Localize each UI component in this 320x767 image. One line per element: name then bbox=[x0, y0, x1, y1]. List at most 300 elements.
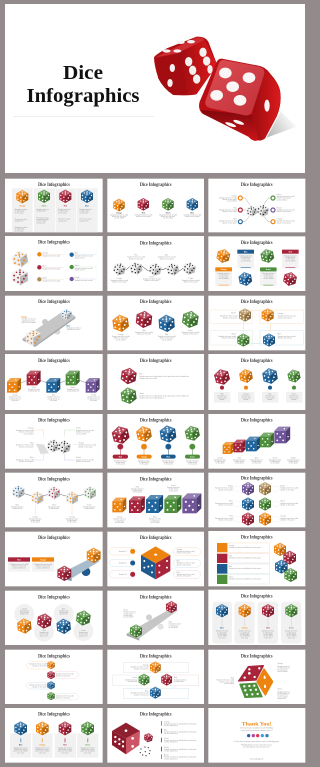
slide 17: five growing dice row: Blue bbox=[153, 517, 157, 519]
slide 28: dice above four grey panels: Sample text here to bbox=[35, 747, 50, 749]
slide 10: five dice wave: Blue bbox=[52, 395, 55, 397]
slide 22: dice with grey circles: here to add bbox=[20, 611, 29, 614]
slide 27: exploded three-face die: can be edited bbox=[277, 670, 287, 673]
slide 1: four dice with bullet panels: The text is a key bbox=[15, 218, 27, 221]
slide 2: four dice row: Green bbox=[166, 212, 170, 214]
slide 10: five dice wave: Sample text here bbox=[47, 396, 60, 399]
slide 1: four dice with bullet panels bbox=[5, 179, 103, 232]
slide 25: vertical dice with pills: Dice Infographics bbox=[38, 654, 70, 659]
slide 29: big red die with list: can be edited here bbox=[164, 724, 178, 727]
slide 27: exploded three-face die: Dice Infographics bbox=[241, 654, 273, 659]
slide 18: dice grid with side labels: Green bbox=[280, 501, 285, 503]
slide 18: dice grid with side labels: Sample text here to add bbox=[280, 488, 298, 490]
slide 6: dice and header cards: can be edited bbox=[263, 277, 273, 280]
slide 7: seesaw with white dice: Sample text here to bbox=[22, 319, 36, 321]
slide 30: thank you: Do you have a design request please visit our SlideEgg page bbox=[234, 740, 279, 743]
slide 10: five dice wave: Sample text here bbox=[9, 396, 21, 399]
illustration: two red dice bbox=[154, 37, 297, 141]
slide 26: four dice in diamond with boxes: Blue bbox=[145, 690, 148, 692]
slide 3: white dice hub with six rings: details on this point bbox=[222, 210, 237, 213]
slide 22: dice with grey circles: Orange bbox=[22, 608, 27, 610]
slide 13: central dice with elbow connectors: can be edited bbox=[23, 432, 33, 435]
slide 17: five growing dice row: on this point bbox=[169, 489, 178, 492]
slide 25: vertical dice with pills bbox=[5, 650, 103, 704]
slide 12: four dice with dots and panels: here to add bbox=[242, 396, 250, 399]
slide 15: ascending staircase of dice: Sample text here bbox=[233, 458, 246, 461]
slide 3: white dice hub with six rings: can be edited bbox=[227, 200, 237, 203]
slide 4: white dice with six list items: Red bbox=[42, 265, 45, 267]
slide 12: four dice with dots and panels: here to add bbox=[266, 396, 274, 399]
slide 9: four dice cycle with boxes: Sample text here to add bbox=[218, 336, 236, 338]
slide 28: dice above four grey panels: point can be edited bbox=[58, 750, 72, 753]
slide 27: exploded three-face die: Orange bbox=[277, 663, 283, 665]
slide 13: central dice with elbow connectors: details on this point bbox=[19, 445, 34, 448]
slide 20: large tri-colour die with pills bbox=[107, 532, 204, 586]
slide 5: five white dice zigzag: Dice Infographics bbox=[140, 241, 172, 246]
slide 8: four large tumbling dice: can be edited bbox=[116, 338, 126, 341]
panel: hero title slide bbox=[5, 4, 305, 173]
slide 7: seesaw with white dice: Blue bbox=[67, 325, 70, 327]
slide 14: four dice with badges and pills: Sample text here bbox=[114, 460, 127, 462]
slide 13: central dice with elbow connectors: Red bbox=[30, 442, 33, 444]
slide 10: five dice wave: this point bbox=[90, 399, 98, 402]
slide 27: exploded three-face die: sample text bbox=[277, 697, 286, 700]
slide 18: dice grid with side labels: Sample text here to add bbox=[215, 488, 233, 490]
slide 6: dice and header cards: Sample text here bbox=[239, 255, 252, 257]
slide 11: two dice with cross and check: Sample text here to add details on this point that can be edited here bbox=[139, 394, 189, 397]
slide 27: exploded three-face die: this point here bbox=[277, 694, 288, 697]
slide 28: dice above four grey panels: here now bbox=[39, 752, 47, 754]
slide 20: large tri-colour die with pills: Blue bbox=[177, 561, 180, 563]
slide 20: large tri-colour die with pills: Sample 01 bbox=[119, 551, 127, 553]
slide 7: seesaw with white dice: Sample text here to bbox=[67, 327, 81, 329]
slide 23: seesaw with green and red dice: Sample text here bbox=[123, 611, 136, 614]
slide 23: seesaw with green and red dice: Green bbox=[123, 610, 128, 612]
slide 1: four dice with bullet panels: on this point bbox=[36, 221, 46, 224]
title: Dice bbox=[63, 62, 103, 84]
slide 10: five dice wave: Orange bbox=[12, 395, 18, 397]
slide 29: big red die with list: Sample text here to add details on this point bbox=[164, 723, 196, 725]
slide 11: two dice with cross and check: Red bbox=[139, 374, 142, 376]
slide 17: five growing dice row: Sample text here bbox=[131, 487, 144, 490]
slide 24: four rounded panels with dice: here now bbox=[219, 637, 226, 639]
slide 17: five growing dice row: Sample text here bbox=[167, 486, 180, 489]
slide 13: central dice with elbow connectors: Sample text here to add bbox=[76, 430, 94, 432]
slide 8: four large tumbling dice: Sample text here to add bbox=[112, 335, 130, 338]
slide 12: four dice with dots and panels: Sample text bbox=[290, 395, 299, 398]
slide 29: big red die with list: Sample text here to add details on this point bbox=[164, 757, 196, 759]
slide 18: dice grid with side labels: Dice Infographics bbox=[241, 477, 273, 482]
slide 13: central dice with elbow connectors: can be edited bbox=[76, 432, 86, 435]
slide 1: four dice with bullet panels: Orange bbox=[19, 206, 25, 208]
slide 27: exploded three-face die bbox=[208, 650, 305, 704]
slide 4: white dice with six list items: Sample text here to add bbox=[75, 279, 92, 282]
slide 26: four dice in diamond with boxes: details on this point bbox=[134, 667, 149, 670]
slide 10: five dice wave: to add details on bbox=[28, 390, 40, 393]
slide 4: white dice with six list items: Dice Infographics bbox=[38, 241, 70, 246]
slide 22: dice with grey circles: Sample text bbox=[40, 631, 49, 634]
slide 11: two dice with cross and check bbox=[107, 354, 204, 410]
slide 10: five dice wave: to add details on bbox=[48, 397, 60, 400]
slide 3: white dice hub with six rings: Orange bbox=[277, 219, 282, 221]
slide 27: exploded three-face die: Sample text here bbox=[277, 666, 290, 668]
slide 15: ascending staircase of dice: Green bbox=[273, 457, 277, 459]
slide 12: four dice with dots and panels: Green bbox=[292, 394, 296, 396]
slide 20: large tri-colour die with pills: details on this point bbox=[177, 552, 191, 555]
slide 21: icon squares list with dice: Sample text here to add details on this point bbox=[229, 567, 261, 570]
slide 19: seesaw with red and orange dice: Orange bbox=[40, 559, 46, 561]
slide 12: four dice with dots and panels: Dice Infographics bbox=[241, 359, 273, 364]
slide 1: four dice with bullet panels: Dice Infographics bbox=[38, 183, 70, 188]
slide 16: white dice zigzag chain: on this point bbox=[68, 521, 77, 524]
slide 3: white dice hub with six rings: Dice Infographics bbox=[241, 183, 273, 188]
slide 14: four dice with badges and pills: Red bbox=[119, 456, 122, 458]
slide 22: dice with grey circles: Sample text bbox=[59, 609, 69, 612]
slide 3: white dice hub with six rings: details on this point bbox=[277, 210, 291, 213]
slide 28: dice above four grey panels: here now bbox=[17, 752, 25, 754]
slide 22: dice with grey circles: details here bbox=[20, 613, 29, 616]
slide 29: big red die with list: Sample text here to add details on this point bbox=[164, 731, 196, 733]
slide 29: big red die with list: Dice Infographics bbox=[140, 713, 172, 718]
slide 1: four dice with bullet panels: can be edited bbox=[36, 220, 46, 223]
slide 21: icon squares list with dice bbox=[208, 531, 305, 586]
slide 5: five white dice zigzag: Red bbox=[134, 255, 138, 257]
slide 4: white dice with six list items: Blue bbox=[75, 253, 78, 255]
slide 2: four dice row: Orange bbox=[116, 212, 122, 214]
slide 30: thank you: Thank You! bbox=[242, 721, 272, 727]
slide 6: dice and header cards: can be edited bbox=[285, 259, 295, 262]
slide 1: four dice with bullet panels: Green bbox=[42, 206, 46, 208]
slide 17: five growing dice row: to add details bbox=[150, 519, 160, 522]
slide 23: seesaw with green and red dice: Red bbox=[169, 622, 172, 624]
slide 8: four large tumbling dice: Sample text here to add bbox=[135, 331, 153, 334]
slide 26: four dice in diamond with boxes: Sample text here bbox=[174, 679, 187, 681]
slide 10: five dice wave: Red bbox=[32, 387, 36, 389]
slide 2: four dice row: details on this point bbox=[136, 215, 151, 218]
slide 8: four large tumbling dice: Red bbox=[142, 330, 146, 332]
slide 24: four rounded panels with dice: Sample text here bbox=[262, 631, 274, 633]
slide 5: five white dice zigzag: Purple bbox=[188, 278, 193, 280]
slide 14: four dice with badges and pills: Blue bbox=[167, 456, 170, 458]
slide 16: white dice zigzag chain: Red bbox=[52, 504, 56, 506]
slide 13: central dice with elbow connectors: Sample text here to add bbox=[16, 430, 33, 432]
slide 15: ascending staircase of dice: Sample text here bbox=[269, 458, 281, 461]
slide 29: big red die with list: can be edited here bbox=[164, 741, 178, 744]
slide 17: five growing dice row: Green bbox=[171, 485, 176, 487]
slide 1: four dice with bullet panels: The text is a key bbox=[36, 216, 49, 219]
slide 6: dice and header cards: Sample text here bbox=[217, 273, 230, 275]
slide 10: five dice wave: Purple bbox=[91, 395, 96, 397]
slide 14: four dice with badges and pills: to add details bbox=[187, 461, 197, 464]
slide 3: white dice hub with six rings: Sample text here to add bbox=[277, 221, 294, 223]
slide 13: central dice with elbow connectors: details on this point bbox=[19, 460, 34, 463]
slide 25: vertical dice with pills: Sample text here to add bbox=[56, 694, 74, 697]
slide 28: dice above four grey panels: Sample text here to bbox=[58, 747, 72, 749]
slide 26: four dice in diamond with boxes: Orange bbox=[143, 664, 148, 666]
slide 15: ascending staircase of dice: Red bbox=[238, 457, 241, 459]
slide 10: five dice wave: Sample text here bbox=[28, 388, 40, 391]
slide 20: large tri-colour die with pills: Sample text here to add bbox=[177, 574, 194, 576]
slide 16: white dice zigzag chain: Sample text here bbox=[83, 505, 96, 508]
slide 30: thank you: We respect your valuable time with SlideEgg bbox=[240, 726, 273, 729]
slide 3: white dice hub with six rings: Green bbox=[277, 194, 281, 196]
slide 5: five white dice zigzag: details on this point bbox=[145, 279, 159, 282]
slide 24: four rounded panels with dice: Sample text here bbox=[238, 631, 251, 633]
slide 17: five growing dice row: Sample text here bbox=[113, 518, 126, 521]
slide 29: big red die with list: Orange bbox=[164, 721, 170, 723]
slide 20: large tri-colour die with pills: Sample 03 bbox=[119, 574, 127, 576]
slide 15: ascending staircase of dice: Dice Infographics bbox=[241, 419, 273, 424]
slide 22: dice with grey circles: here to add bbox=[79, 633, 88, 636]
slide 28: dice above four grey panels: point can be edited bbox=[14, 750, 28, 753]
slide 15: ascending staircase of dice: Sample text here bbox=[250, 458, 263, 461]
slide 16: white dice zigzag chain: Orange bbox=[69, 516, 75, 518]
slide 3: white dice hub with six rings: Sample text here to add bbox=[219, 221, 237, 223]
slide 17: five growing dice row: Sample text here bbox=[149, 518, 161, 521]
slide 9: four dice cycle with boxes: Dice Infographics bbox=[241, 300, 273, 305]
slide 11: two dice with cross and check: Sample text here to add bbox=[139, 377, 157, 380]
slide 27: exploded three-face die: can be edited bbox=[224, 682, 234, 685]
slide 2: four dice row: Sample text here to add bbox=[184, 214, 201, 216]
slide 15: ascending staircase of dice: on this point bbox=[216, 462, 225, 465]
slide 6: dice and header cards: Dice Infographics bbox=[241, 241, 273, 246]
slide 15: ascending staircase of dice: on this point bbox=[289, 462, 298, 465]
slide 5: five white dice zigzag: Sample text here to add bbox=[143, 277, 161, 280]
slide 6: dice and header cards: Green bbox=[266, 269, 271, 271]
slide 21: icon squares list with dice: Red bbox=[229, 556, 232, 558]
slide 13: central dice with elbow connectors: Blue bbox=[30, 457, 33, 459]
slide 24: four rounded panels with dice: to add details bbox=[286, 631, 296, 634]
slide 14: four dice with badges and pills: Sample text here bbox=[138, 460, 150, 462]
slide 22: dice with grey circles: details here bbox=[59, 613, 68, 616]
slide 13: central dice with elbow connectors: Sample text here to add bbox=[78, 445, 96, 447]
slide 30: thank you bbox=[208, 708, 305, 763]
slide 1: four dice with bullet panels: Red bbox=[64, 206, 67, 208]
slide 20: large tri-colour die with pills: Dice Infographics bbox=[140, 536, 172, 541]
slide 14: four dice with badges and pills: on this point bbox=[164, 463, 173, 466]
slide 10: five dice wave: Dice Infographics bbox=[38, 359, 70, 364]
slide 12: four dice with dots and panels: details bbox=[244, 398, 249, 401]
slide 1: four dice with bullet panels: sample item bbox=[15, 220, 24, 223]
slide 3: white dice hub with six rings: Orange bbox=[231, 195, 237, 197]
slide 10: five dice wave: Green bbox=[71, 387, 75, 389]
slide 5: five white dice zigzag: Sample text here to add bbox=[182, 279, 200, 282]
slide 26: four dice in diamond with boxes: details on this point bbox=[134, 693, 149, 696]
slide 7: seesaw with white dice: point can be edited bbox=[22, 321, 36, 324]
slide 15: ascending staircase of dice: on this point bbox=[235, 462, 244, 465]
slide 6: dice and header cards: to add details bbox=[263, 274, 273, 277]
slide 28: dice above four grey panels: here now bbox=[62, 752, 69, 754]
slide 28: dice above four grey panels: point can be edited bbox=[35, 750, 49, 753]
slide 24: four rounded panels with dice: to add details bbox=[240, 631, 250, 634]
slide 9: four dice cycle with boxes: Sample text here to add bbox=[278, 336, 295, 338]
slide 15: ascending staircase of dice: Blue bbox=[255, 457, 258, 459]
slide 3: white dice hub with six rings: details on this point bbox=[277, 221, 291, 224]
slide 2: four dice row: Sample text here to add bbox=[135, 214, 152, 216]
slide 19: seesaw with red and orange dice: Red bbox=[17, 559, 21, 561]
slide 21: icon squares list with dice: Sample text here to add details on this point bbox=[229, 578, 261, 581]
slide 22: dice with grey circles: here to add bbox=[40, 633, 48, 636]
slide 11: two dice with cross and check: Dice Infographics bbox=[140, 359, 172, 364]
slide 22: dice with grey circles: Green bbox=[81, 630, 86, 632]
slide 4: white dice with six list items: Brown bbox=[42, 277, 47, 279]
slide 22: dice with grey circles: Red bbox=[42, 630, 46, 632]
slide 6: dice and header cards bbox=[208, 236, 305, 291]
slide 26: four dice in diamond with boxes: Sample text here to add bbox=[131, 693, 148, 695]
slide 27: exploded three-face die: Green bbox=[277, 689, 282, 691]
slide 16: white dice zigzag chain: to add details bbox=[30, 519, 40, 522]
slide 24: four rounded panels with dice: Sample text here bbox=[216, 631, 228, 633]
slide 2: four dice row: Sample text here to add bbox=[159, 214, 177, 216]
title bbox=[26, 62, 140, 107]
slide 15: ascending staircase of dice: on this point bbox=[271, 462, 280, 465]
slide 1: four dice with bullet panels: Sample text here bbox=[58, 209, 71, 211]
slide 16: white dice zigzag chain: Dice Infographics bbox=[38, 477, 70, 482]
slide 25: vertical dice with pills: details on this point bbox=[56, 696, 71, 699]
slide 1: four dice with bullet panels: to add details bbox=[15, 228, 25, 231]
slide 9: four dice cycle with boxes: details on this point bbox=[222, 337, 237, 340]
slide 3: white dice hub with six rings: Red bbox=[234, 207, 237, 209]
slide 26: four dice in diamond with boxes: Dice Infographics bbox=[140, 654, 172, 659]
slide 11: two dice with cross and check: Green bbox=[139, 393, 144, 395]
slide 13: central dice with elbow connectors: details on this point bbox=[19, 431, 34, 434]
slide 8: four large tumbling dice: Orange bbox=[118, 334, 123, 336]
slide 28: dice above four grey panels bbox=[5, 708, 103, 763]
slide 18: dice grid with side labels: details on this point bbox=[218, 504, 233, 507]
slide 3: white dice hub with six rings: details on this point bbox=[222, 221, 237, 224]
slide 27: exploded three-face die: Red bbox=[231, 677, 234, 679]
slide 1: four dice with bullet panels: to add details bbox=[79, 210, 89, 213]
slide 16: white dice zigzag chain: Sample text here bbox=[29, 517, 42, 520]
slide 1: four dice with bullet panels: Sample text here bbox=[15, 226, 27, 229]
slide 28: dice above four grey panels: Blue bbox=[19, 745, 23, 747]
slide 29: big red die with list bbox=[107, 708, 204, 763]
slide 15: ascending staircase of dice: Sample text here bbox=[287, 458, 300, 461]
slide 24: four rounded panels with dice: to add details bbox=[217, 631, 227, 634]
slide 28: dice above four grey panels: Sample text here to bbox=[13, 747, 28, 749]
slide 1: four dice with bullet panels: Sample text here bbox=[15, 209, 27, 211]
slide 6: dice and header cards: on this point bbox=[241, 258, 251, 261]
slide 14: four dice with badges and pills: to add details bbox=[139, 461, 149, 464]
slide 23: seesaw with green and red dice: to add details bbox=[169, 624, 179, 627]
slide 14: four dice with badges and pills: Dice Infographics bbox=[140, 419, 172, 424]
slide 4: white dice with six list items: Orange bbox=[42, 252, 48, 254]
slide 20: large tri-colour die with pills: Sample 02 bbox=[119, 563, 127, 565]
slide 16: white dice zigzag chain: Sample text here bbox=[48, 505, 60, 508]
slide 4: white dice with six list items bbox=[5, 236, 103, 291]
slide 5: five white dice zigzag: Green bbox=[149, 276, 154, 278]
slide 6: dice and header cards: to add details bbox=[241, 256, 251, 259]
slide 8: four large tumbling dice: details on this point bbox=[160, 337, 174, 340]
slide 8: four large tumbling dice bbox=[107, 296, 204, 350]
slide 14: four dice with badges and pills: Sample text here bbox=[162, 460, 175, 462]
slide 1: four dice with bullet panels: on this point bbox=[15, 211, 24, 214]
slide 10: five dice wave: to add details on bbox=[9, 397, 21, 400]
slide 30: thank you: If you need any assistance please reach us bbox=[241, 729, 273, 732]
slide 26: four dice in diamond with boxes: Red bbox=[174, 677, 177, 679]
slide 30: thank you: SlideEgg design services that will increase bbox=[241, 744, 272, 747]
slide 26: four dice in diamond with boxes: to add details bbox=[127, 680, 137, 683]
slide 19: seesaw with red and orange dice: Sample text here to add bbox=[10, 564, 28, 566]
slide 15: ascending staircase of dice: to add details bbox=[234, 460, 244, 463]
slide 6: dice and header cards: Sample text here bbox=[284, 255, 297, 257]
slide 5: five white dice zigzag: details on this point bbox=[112, 281, 127, 284]
slide 14: four dice with badges and pills: Orange bbox=[141, 456, 147, 458]
slide 13: central dice with elbow connectors: Orange bbox=[78, 442, 84, 444]
slide 6: dice and header cards: can be edited bbox=[219, 277, 229, 280]
slide 19: seesaw with red and orange dice: can be edited here bbox=[36, 566, 50, 569]
slide 18: dice grid with side labels: Purple bbox=[228, 485, 233, 487]
slide 14: four dice with badges and pills bbox=[107, 414, 204, 469]
slide 1: four dice with bullet panels: sample item bbox=[58, 219, 68, 222]
slide 2: four dice row: details on this point bbox=[161, 215, 176, 218]
slide 1: four dice with bullet panels: to add details bbox=[58, 210, 68, 213]
slide 5: five white dice zigzag: Sample text here to add bbox=[127, 256, 145, 259]
slide 2: four dice row: Red bbox=[142, 212, 145, 214]
slide 2: four dice row: details on this point bbox=[185, 215, 200, 218]
slide 26: four dice in diamond with boxes: to add details bbox=[174, 680, 184, 683]
slide 17: five growing dice row: to add details bbox=[168, 488, 178, 491]
slide 26: four dice in diamond with boxes: Sample text here to add bbox=[131, 667, 148, 669]
slide 16: white dice zigzag chain: to add details bbox=[84, 507, 94, 510]
slide 23: seesaw with green and red dice: can be edited bbox=[123, 616, 133, 619]
slide 6: dice and header cards: on this point bbox=[219, 275, 229, 278]
slide 16: white dice zigzag chain: to add details bbox=[12, 507, 22, 510]
slide 28: dice above four grey panels: Green bbox=[85, 745, 90, 747]
slide 2: four dice row bbox=[107, 179, 204, 232]
slide 15: ascending staircase of dice: Sample text here bbox=[214, 458, 226, 461]
slide 6: dice and header cards: on this point bbox=[264, 275, 273, 278]
slide 13: central dice with elbow connectors: Sample text here to add bbox=[16, 459, 33, 461]
slide 4: white dice with six list items: Sample text here to add bbox=[42, 279, 60, 282]
slide 9: four dice cycle with boxes: Brown bbox=[231, 313, 236, 315]
slide 18: dice grid with side labels: Sample text here to add bbox=[215, 518, 233, 520]
slide 25: vertical dice with pills: Sample text here to add bbox=[56, 673, 74, 676]
slide 27: exploded three-face die: Sample text here to add bbox=[216, 680, 234, 682]
slide 13: central dice with elbow connectors: details on this point bbox=[78, 445, 93, 448]
slide 9: four dice cycle with boxes bbox=[208, 296, 305, 350]
slide 2: four dice row: can be edited bbox=[114, 217, 124, 220]
slide 22: dice with grey circles: Sample text bbox=[20, 609, 29, 612]
slide 25: vertical dice with pills: details on this point bbox=[32, 685, 47, 688]
slide 3: white dice hub with six rings bbox=[208, 179, 305, 232]
slide 8: four large tumbling dice: Sample text here to add bbox=[158, 335, 176, 338]
slide 24: four rounded panels with dice: Blue bbox=[220, 628, 224, 630]
slide 16: white dice zigzag chain: Sample text here bbox=[11, 505, 24, 508]
slide 24: four rounded panels with dice: Orange bbox=[242, 628, 248, 630]
slide 15: ascending staircase of dice: Purple bbox=[291, 457, 296, 459]
slide 16: white dice zigzag chain: on this point bbox=[31, 521, 40, 524]
slide 12: four dice with dots and panels: Red bbox=[220, 394, 224, 396]
slide 21: icon squares list with dice: Sample text here to add details on this point bbox=[229, 546, 261, 549]
slide 17: five growing dice row: to add details bbox=[115, 519, 125, 522]
slide 12: four dice with dots and panels: here to add bbox=[290, 396, 298, 399]
slide 28: dice above four grey panels: Orange bbox=[39, 745, 45, 747]
slide 21: icon squares list with dice: Orange bbox=[229, 545, 234, 547]
slide 12: four dice with dots and panels bbox=[208, 354, 305, 410]
slide 12: four dice with dots and panels: Sample text bbox=[242, 395, 251, 398]
slide 24: four rounded panels with dice: can be edited bbox=[217, 635, 227, 638]
slide 5: five white dice zigzag: details on this point bbox=[160, 257, 174, 260]
slide 1: four dice with bullet panels: sample item that bbox=[36, 218, 49, 221]
slide 19: seesaw with red and orange dice: Sample text here to add bbox=[34, 564, 52, 566]
slide 23: seesaw with green and red dice: on this point bbox=[169, 626, 178, 629]
slide 26: four dice in diamond with boxes bbox=[107, 650, 204, 704]
slide 1: four dice with bullet panels: Blue bbox=[85, 206, 89, 208]
slide 20: large tri-colour die with pills: Red bbox=[177, 572, 180, 574]
slide 15: ascending staircase of dice bbox=[208, 414, 305, 469]
slide 29: big red die with list: Blue bbox=[164, 729, 167, 731]
